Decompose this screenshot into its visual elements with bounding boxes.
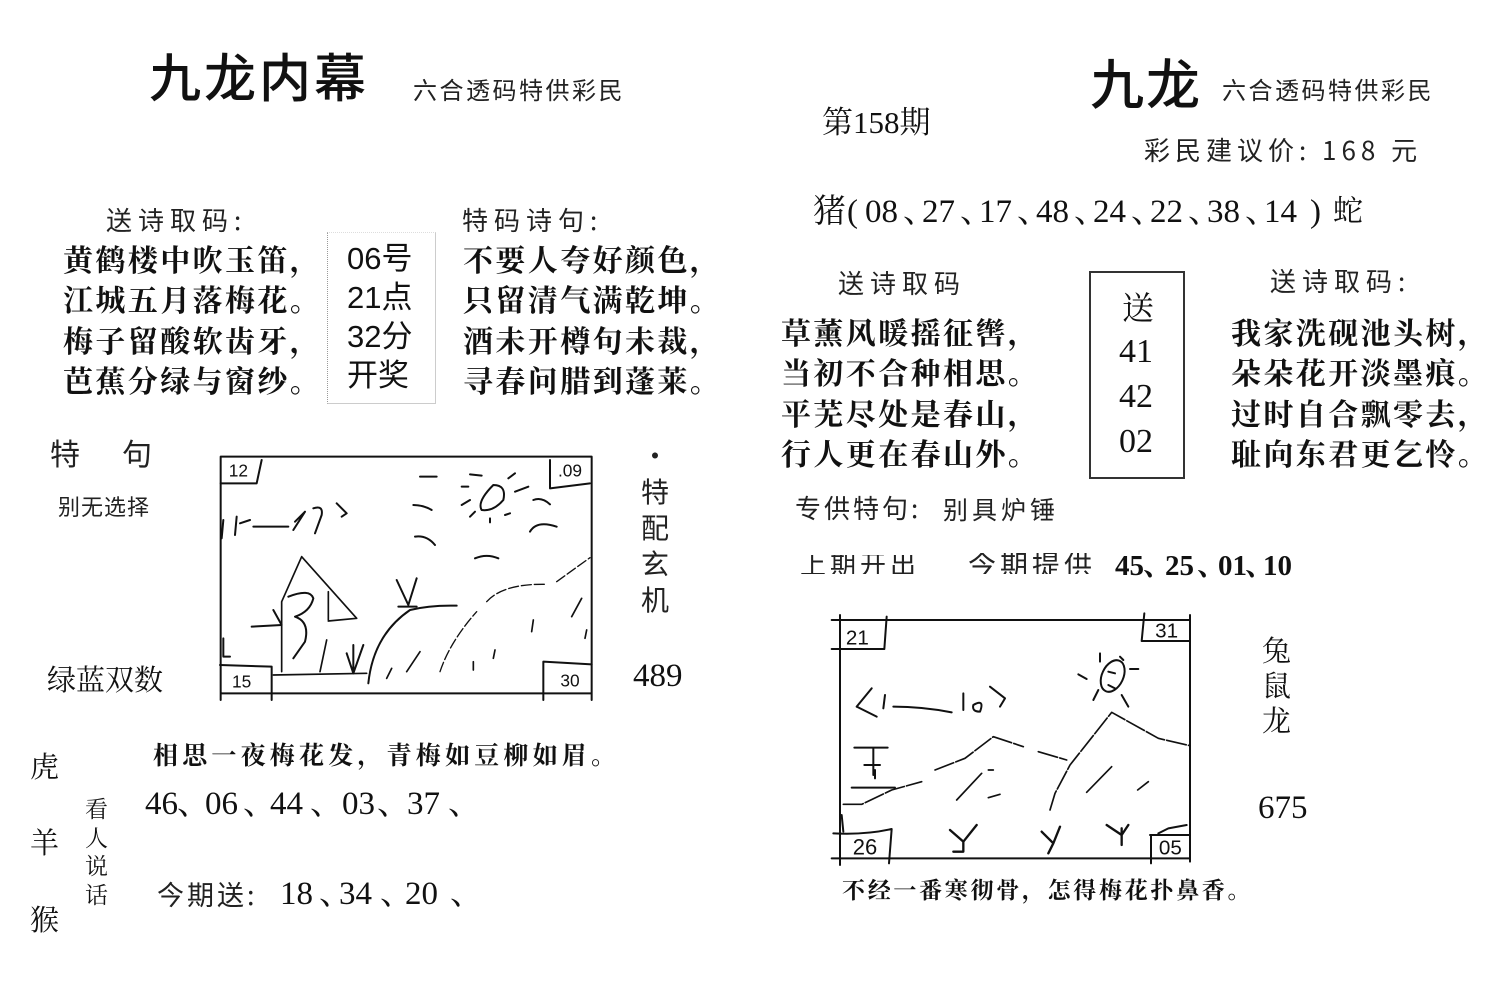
panel: gift box: 41 [1119,333,1153,370]
number 675: 675 [1258,790,1308,826]
zodiac number row: ( [847,194,858,230]
panel: draw time box: 21点 [347,280,412,315]
zodiac number row: 、 [960,194,993,230]
panel: right poem a: 草薰风暖摇征辔， [781,318,1040,351]
this issue gift numbers: 18 [280,876,313,912]
panel: left poem heading: 送诗取码: [106,201,247,238]
left subtitle: 六合透码特供彩民 [413,71,625,106]
panel: right poem b [1231,318,1490,472]
special phrase label: 特句 [50,430,194,474]
zodiac number row: 、 [1017,194,1050,230]
zodiac number row: 、 [1245,194,1278,230]
panel: left poem: 梅子留酸软齿牙， [63,326,322,359]
left number row: 37 [407,786,440,822]
side zodiac column right: 鼠 [1262,671,1291,703]
sketch: left puzzle drawing: 12 [229,460,248,480]
left number row: 、 [377,786,410,822]
panel: gift box: 42 [1119,378,1153,415]
panel: right poem a [781,318,1040,472]
special phrase text: 别无选择 [58,490,150,522]
panel: right poem a: 当初不合种相思。 [781,358,1040,391]
panel: draw time box: 06号 [347,241,412,276]
panel: right poem b: 朵朵花开淡墨痕。 [1231,358,1490,391]
zodiac number row: 蛇 [1333,195,1363,228]
panel: draw time box [327,232,436,404]
zodiac number row: 、 [903,194,936,230]
special phrase right [795,489,1059,527]
panel: special poem: 酒未开樽句未裁， [463,326,722,359]
right proverb line: 不经一番寒彻骨，怎得梅花扑鼻香。 [842,878,1253,903]
watch people talk column: 话 [85,882,108,908]
zodiac number row: 24 [1093,194,1126,230]
this issue supplied numbers: 45 [1115,550,1144,582]
sketch: left puzzle drawing: .09 [558,460,582,480]
side zodiac column right: 龙 [1262,706,1291,738]
zodiac number row: 17 [979,194,1012,230]
suggested price: 彩民建议价: 168 元 [1144,131,1422,168]
left number row: 03 [342,786,375,822]
left number row: 06 [205,786,238,822]
panel: left poem: 江城五月落梅花。 [63,285,322,318]
zodiac column left [30,752,59,937]
panel: left poem: 芭蕉分绿与窗纱。 [63,366,322,399]
zodiac column left: 虎 [30,752,59,784]
zodiac number row: 、 [1074,194,1107,230]
right subtitle: 六合透码特供彩民 [1222,71,1434,106]
sketch: left puzzle drawing [219,456,593,701]
left number row: 、 [310,786,343,822]
this issue supplied numbers: 、 [1143,550,1172,582]
panel: draw time box: 32分 [347,319,412,354]
this issue gift numbers: 、 [450,876,483,912]
panel: right poem a: 平芜尽处是春山， [781,399,1040,432]
zodiac column left: 羊 [30,828,59,860]
special phrase right: 别具炉锤 [943,491,1059,527]
sketch: right puzzle drawing: 21 [846,626,869,649]
side hint column left: 玄 [641,543,669,583]
panel: right poem a: 行人更在春山外。 [781,439,1040,472]
panel: gift box: 送 [1122,290,1154,326]
panel: special poem: 不要人夸好颜色， [463,245,722,278]
zodiac number row: 14 [1264,194,1297,230]
zodiac number row: 27 [922,194,955,230]
panel: right poem b: 耻向东君更乞怜。 [1231,439,1490,472]
zodiac number row: 22 [1150,194,1183,230]
this issue gift numbers: 今期送: [157,874,258,913]
sketch: right puzzle drawing: 31 [1155,620,1178,643]
panel: gift box: 02 [1119,423,1153,460]
issue number: 第158期 [822,105,930,140]
left number row: 、 [177,786,210,822]
panel: special poem [463,244,722,399]
watch people talk column: 看 [85,797,108,822]
side hint column left [641,435,669,619]
zodiac number row [813,194,1363,230]
zodiac column left: 猴 [30,905,59,937]
this issue supplied numbers: 01 [1218,550,1247,582]
colour hint: 绿蓝双数 [47,665,163,697]
sketch: right puzzle drawing: 26 [853,834,877,859]
panel: gift box [1089,271,1185,479]
this issue supplied numbers: 、 [1197,550,1226,582]
zodiac number row: 48 [1036,194,1069,230]
this issue supplied numbers [968,550,1292,582]
panel: right poem b: 过时自合飘零去， [1231,399,1490,432]
this issue gift numbers [157,874,483,913]
side hint column left: 配 [641,507,669,547]
side hint column left: 机 [641,579,669,619]
zodiac number row: ) [1310,194,1321,230]
watch people talk column: 人 [85,826,108,850]
zodiac number row: 、 [1131,194,1164,230]
side hint column left: · [641,435,669,475]
side hint column left: 特 [641,471,669,511]
this issue gift numbers: 、 [319,876,352,912]
panel: right poem b: 我家洗砚池头树， [1231,318,1490,351]
zodiac number row: 08 [865,194,898,230]
zodiac number row: 38 [1207,194,1240,230]
this issue gift numbers: 34 [339,876,372,912]
panel: left poem [63,245,322,399]
sketch: left puzzle drawing: 15 [232,672,251,692]
left number row: 44 [270,786,303,822]
panel: right poem heading a: 送诗取码 [838,264,966,301]
panel: right poem heading b: 送诗取码: [1270,262,1411,299]
side zodiac column right: 兔 [1262,636,1291,668]
panel: left poem: 黄鹤楼中吹玉笛， [63,245,322,278]
watch people talk column: 说 [85,854,108,879]
number 489: 489 [633,658,682,694]
left title: 九龙内幕 [149,37,369,112]
panel: draw time box: 开奖 [347,358,409,393]
this issue supplied numbers: 、 [1245,550,1274,582]
zodiac number row: 、 [1188,194,1221,230]
zodiac number row: 猪 [813,194,846,230]
left number row [145,786,481,822]
this issue supplied numbers: 25 [1165,550,1194,582]
sketch: right puzzle drawing: 05 [1159,836,1182,859]
this issue gift numbers: 、 [380,876,413,912]
left number row: 46 [145,786,178,822]
sketch: right puzzle drawing [830,612,1191,866]
left number row: 、 [243,786,276,822]
left number row: 、 [448,786,481,822]
panel: special poem: 寻春问腊到蓬莱。 [463,366,722,399]
special phrase right: 专供特句: [795,489,921,526]
right title: 九龙 [1090,41,1202,120]
side zodiac column right [1262,636,1291,738]
panel: special poem: 只留清气满乾坤。 [463,285,722,318]
this issue supplied numbers: 10 [1263,550,1292,582]
sketch: left puzzle drawing: 30 [560,670,580,690]
watch people talk column [85,797,108,908]
panel: special poem heading: 特码诗句: [462,201,603,238]
left proverb line: 相思一夜梅花发，青梅如豆柳如眉。 [153,743,620,770]
this issue gift numbers: 20 [405,876,438,912]
